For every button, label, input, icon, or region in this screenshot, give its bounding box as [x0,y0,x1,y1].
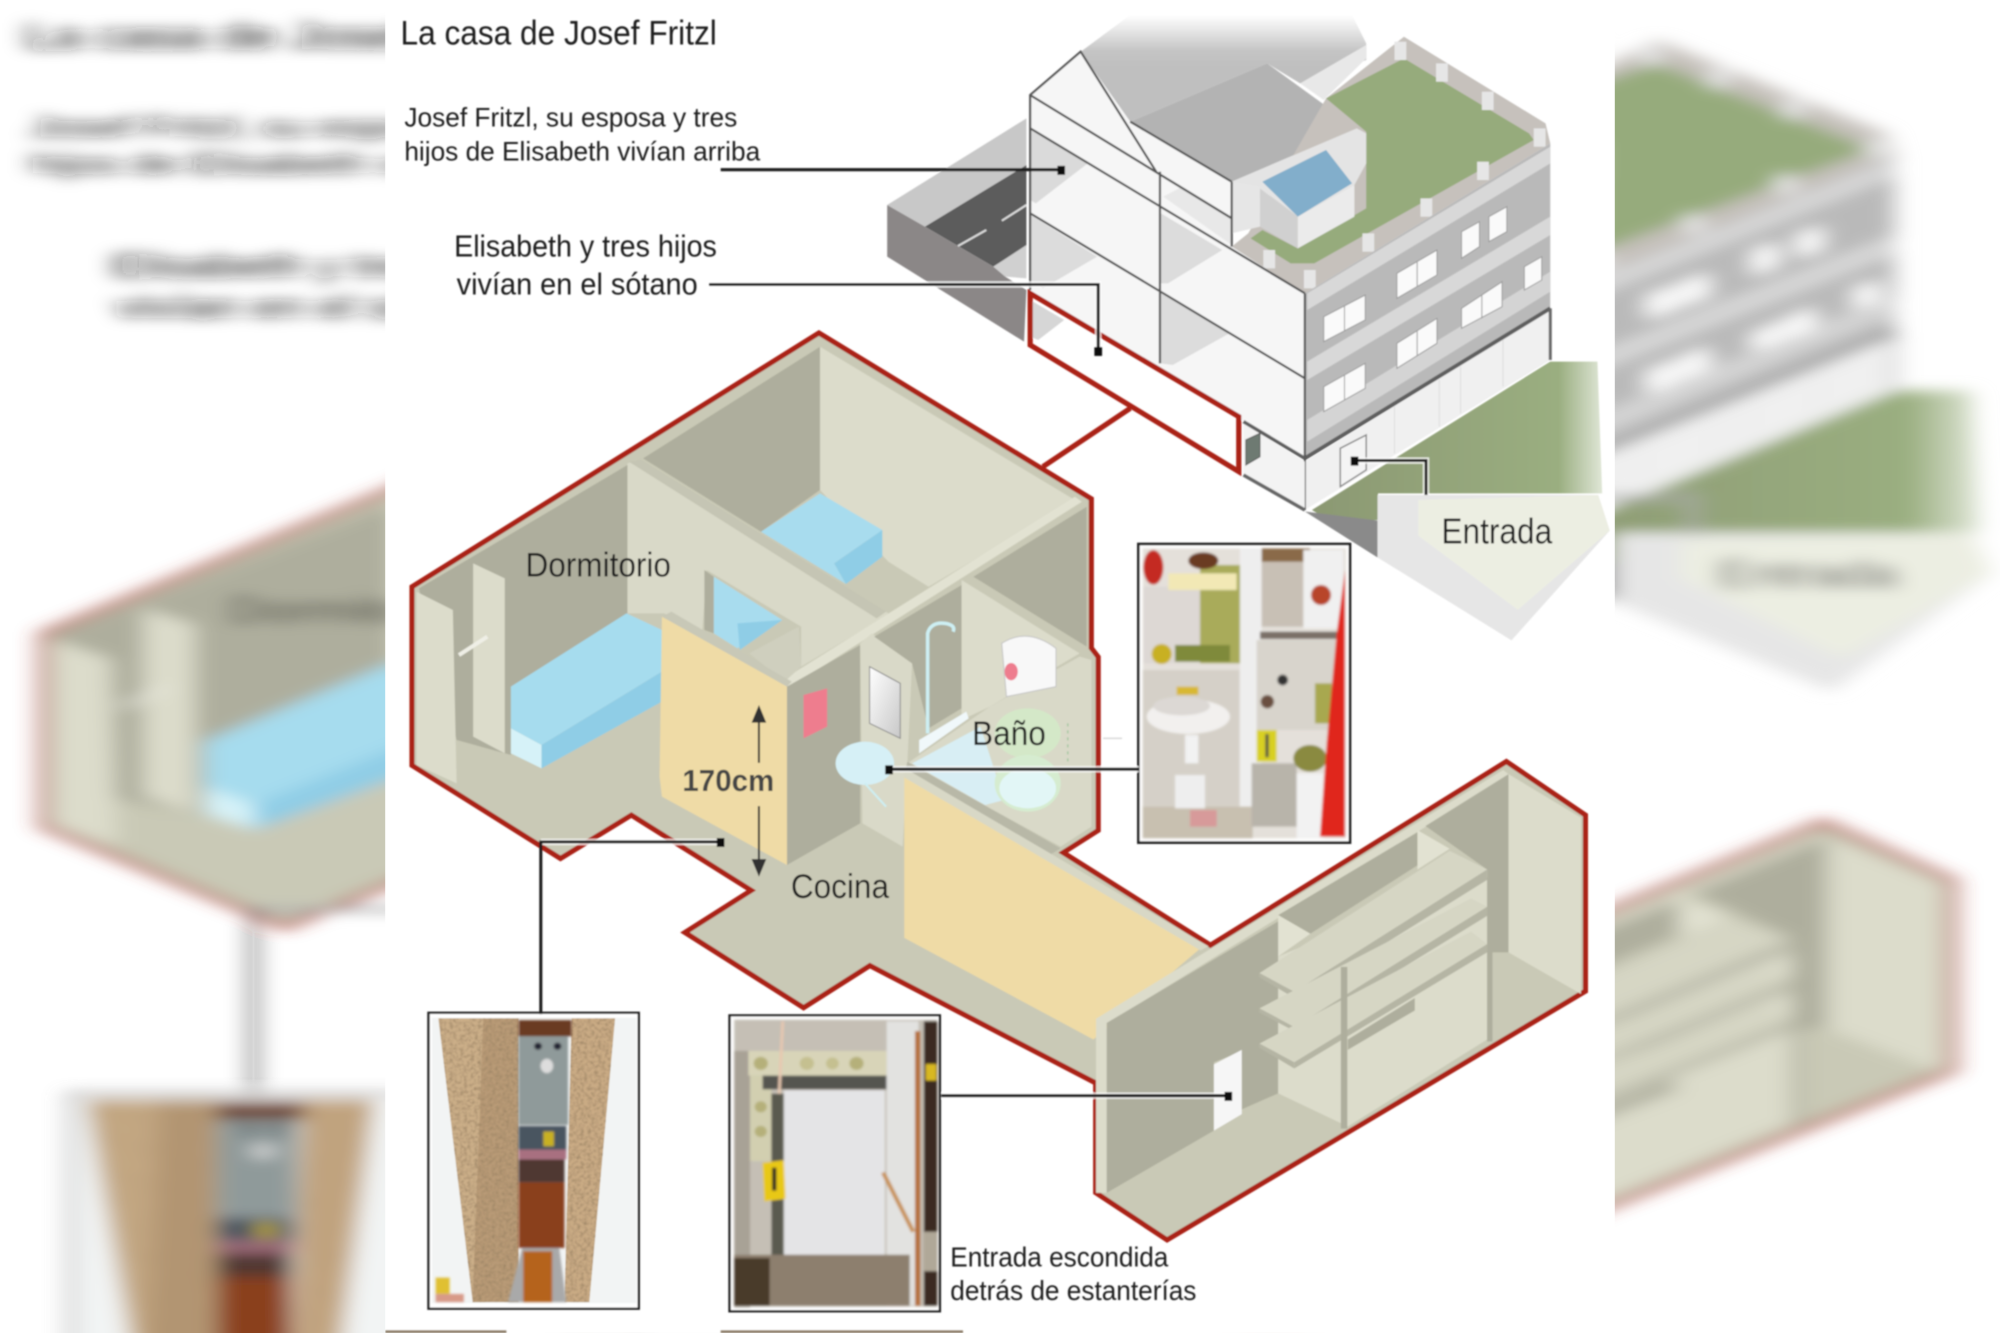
leader lines [541,170,1426,1096]
partition wall [627,459,1082,687]
ground lawn [1312,362,1602,520]
storage and lower wall [904,768,1581,1193]
basement highlight red box [1030,293,1239,472]
photo frame [730,1015,940,1311]
entrance plaque [1378,495,1610,640]
left dark wall [1107,921,1278,1193]
photo content [1143,548,1346,838]
bathroom [836,580,1122,854]
basement front [1243,422,1305,510]
terrace [1232,37,1550,293]
label: upstairs: Josef Fritzl, su esposa y tres [404,102,737,132]
connector to plan [1043,408,1130,467]
leaders [541,170,1426,1096]
label: basement: vivían en el sótano [457,268,698,302]
label: baño: Baño [972,715,1046,753]
label: cocina: Cocina [791,868,890,906]
center panel white [385,0,1615,1333]
photo: hidden entrance [730,1015,940,1311]
wall top highlight [1096,770,1510,1193]
label: entrada: Entrada [1441,511,1552,551]
photo: bathroom [1138,544,1350,843]
ground corner [1305,512,1378,557]
label: height: 170cm [682,764,774,798]
photo: corridor [429,1013,639,1309]
rooms [417,347,1122,865]
photo content [734,1020,937,1307]
skylight box [1232,128,1366,248]
upper bedroom [643,347,1087,647]
photo frame [1138,544,1350,843]
roof [1081,15,1366,182]
label: upstairs [404,102,760,167]
cut-away front face [1030,52,1305,510]
house illustration [887,15,1602,520]
photo content [432,1018,636,1303]
photo frame [429,1013,639,1309]
title: La casa de Josef Fritzl [401,15,717,53]
label: hidden entrance: detrás de estanterías [950,1275,1196,1306]
doorway with bed [704,570,801,682]
bottom edge strip [385,1330,963,1333]
label: hidden entrance [950,1242,1196,1306]
left bedroom wall [419,465,627,755]
leader dots [717,166,1358,1101]
label: hidden entrance: Entrada escondida [950,1242,1169,1273]
lower bed [511,613,662,768]
floor plan [412,333,1585,1240]
shelves [1259,851,1492,1129]
kitchen partition [787,645,860,865]
street block [887,118,1026,342]
hidden door [1214,1050,1242,1131]
label: basement: Elisabeth y tres hijos [454,229,717,263]
cream door panel [660,612,792,865]
leader halo [541,284,1426,1096]
label: upstairs: hijos de Elisabeth vivían arriba [404,137,760,167]
ground floor band [1305,308,1550,510]
label: dormitorio: Dormitorio [526,547,671,585]
back walls [1278,774,1581,1127]
lower cream wall [904,768,1209,1039]
main infographic panel [385,15,1610,1333]
windows [1324,207,1542,412]
building side wall [1305,143,1550,458]
closets [417,563,505,783]
floor outline [412,333,1585,1240]
label: basement [454,229,717,302]
height arrow [753,707,765,875]
